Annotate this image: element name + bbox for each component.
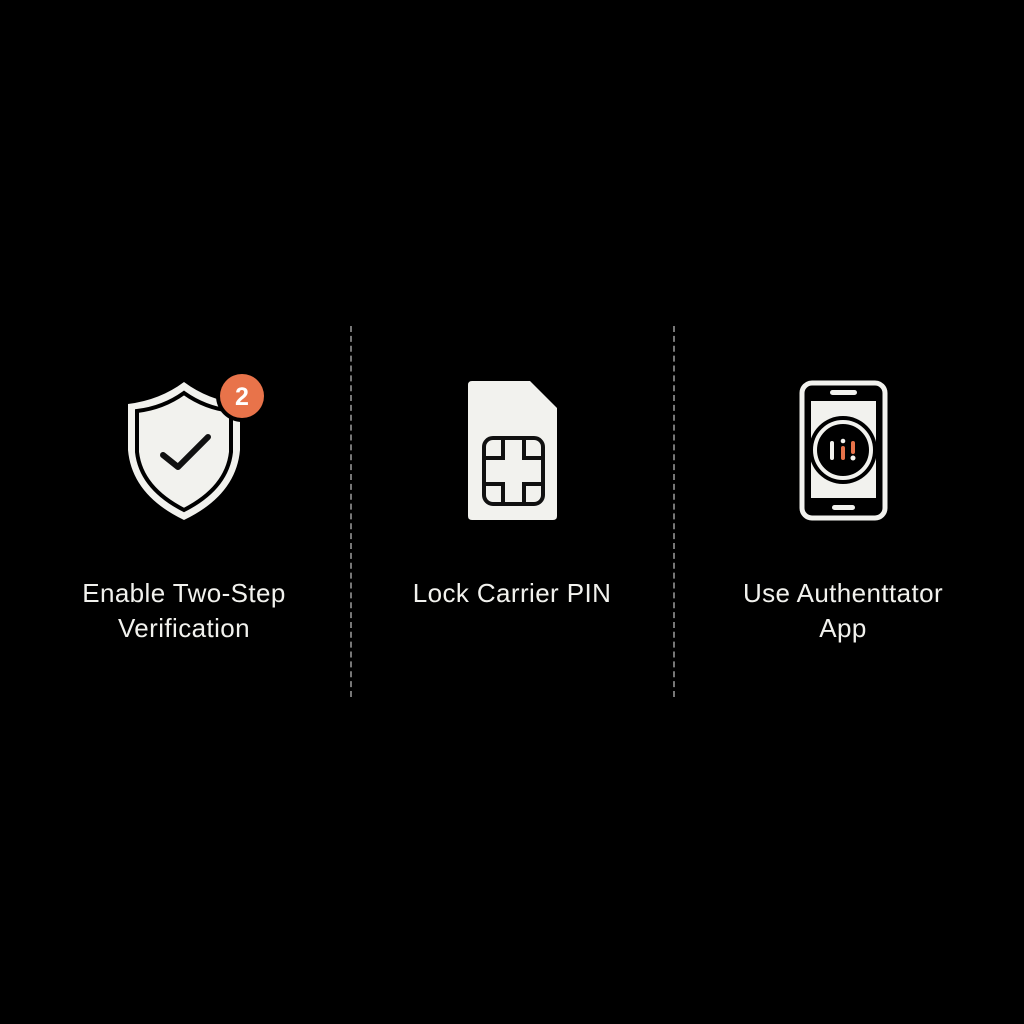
label: authenticator [743, 578, 943, 643]
icon: phone with authenticator [800, 380, 888, 520]
icon: shield with badge: 2 [235, 383, 249, 411]
label: carrier PIN: Lock Carrier PIN [413, 578, 611, 608]
label: authenticator: Use Authenttator [743, 578, 943, 608]
divider right [673, 326, 675, 697]
label: two-step: Verification [118, 613, 250, 643]
icon: SIM card [468, 381, 557, 520]
label: two-step: Enable Two-Step [82, 578, 286, 608]
icon: shield with badge [128, 374, 264, 520]
label: authenticator: App [819, 613, 867, 643]
divider left [350, 326, 352, 697]
label: two-step [82, 578, 286, 643]
